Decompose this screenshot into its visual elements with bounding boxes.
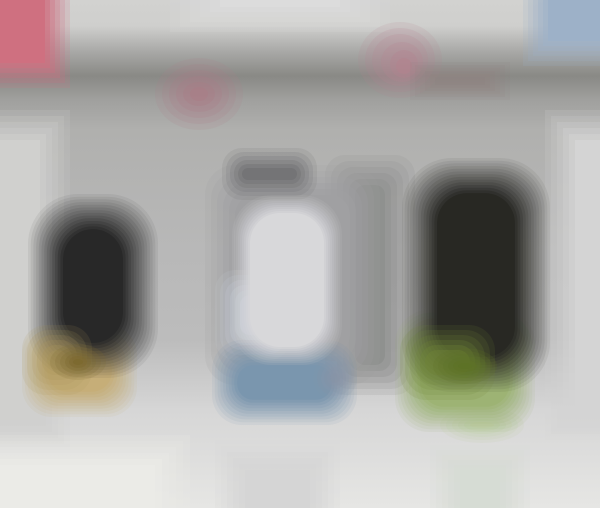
gold left overlay: [22, 325, 92, 395]
side shading: [0, 110, 600, 450]
red marker left: [155, 58, 243, 130]
white body: [232, 195, 342, 365]
header highlight: [170, 0, 390, 32]
red corner tab: [0, 0, 70, 88]
green base: [395, 310, 535, 432]
left light edge: [0, 110, 70, 450]
blue corner tab: [523, 0, 600, 66]
dark bar: [28, 194, 158, 378]
column 2: white bar with blue base: [205, 148, 380, 425]
footer glow: [0, 435, 530, 508]
red marker trail: [410, 62, 510, 100]
dark bar: [402, 158, 550, 392]
blue base: [212, 340, 357, 425]
footer gray middle: [215, 440, 340, 508]
footer green right: [430, 445, 530, 508]
gray surround: [205, 165, 380, 385]
top gray label: [222, 148, 317, 200]
column 1: dark bar with gold base: [22, 194, 158, 417]
green shadow: [433, 348, 497, 384]
pale transition: [215, 270, 290, 360]
header panel: [0, 0, 600, 130]
right mid shade: [325, 155, 415, 395]
gold shadow: [50, 344, 106, 380]
footer cream left: [0, 435, 190, 508]
blue base right tint: [313, 356, 357, 400]
green left overlay: [400, 325, 495, 400]
pale green foot: [440, 407, 524, 443]
gold base: [22, 325, 137, 417]
right light edge: [545, 110, 600, 440]
red marker right: [358, 22, 442, 98]
column 3: dark bar with green base: [395, 158, 550, 443]
